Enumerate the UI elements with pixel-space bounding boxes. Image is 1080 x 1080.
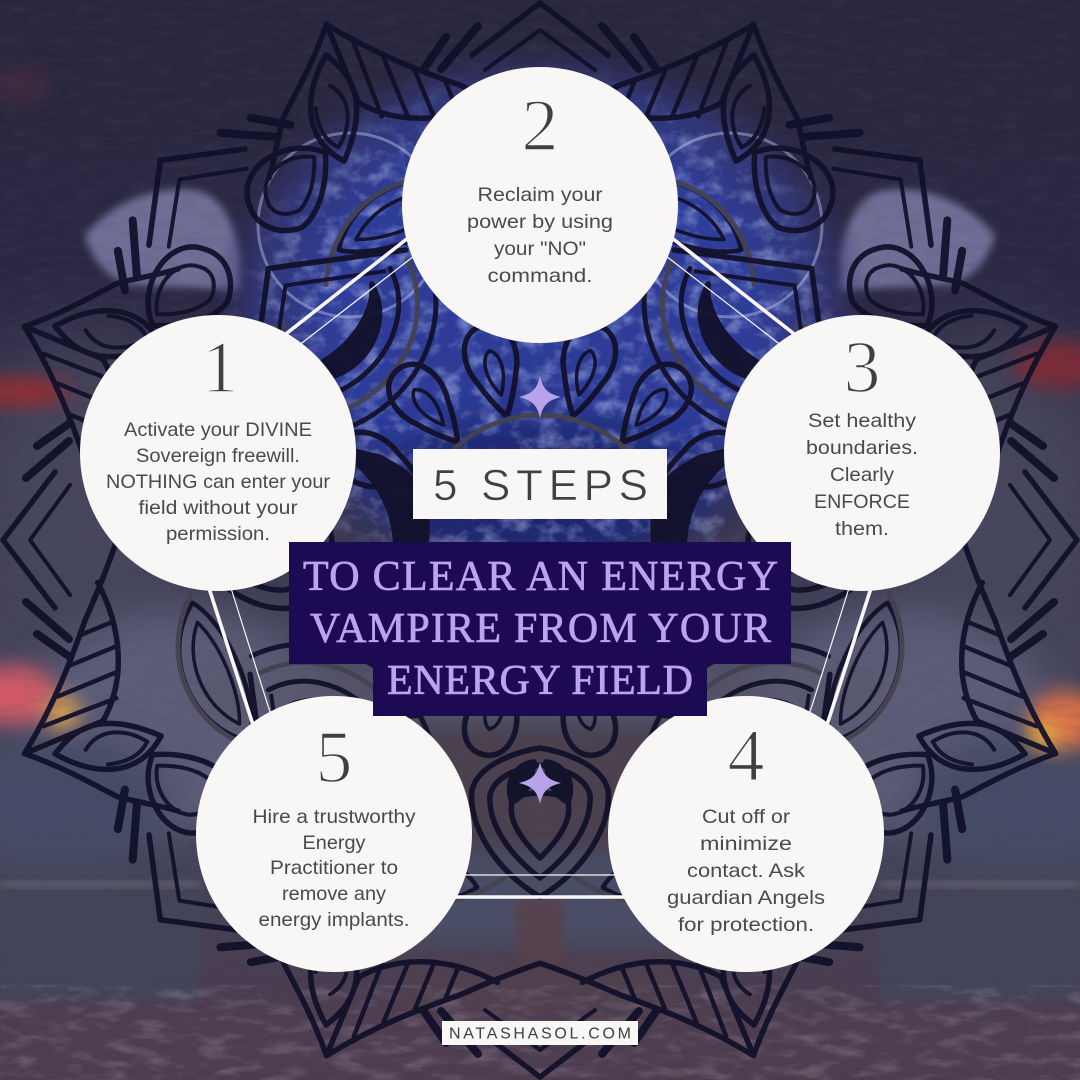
footer: website: NATASHASOL.COM: [449, 1026, 631, 1042]
left statue: [0, 189, 330, 1005]
step 3 circle: [724, 315, 1000, 591]
footer: website: [442, 1021, 638, 1045]
step 4 circle: guardian Angels: [667, 887, 825, 909]
step 5 circle: remove any: [282, 883, 386, 905]
step 4 circle: Cut off or: [702, 806, 791, 828]
step 1 circle: [80, 315, 356, 591]
diagonal kites with crescents: [182, 182, 898, 898]
step 1 circle: permission.: [166, 523, 270, 545]
step 4 circle: contact. Ask: [687, 860, 805, 882]
step 5 circle: 5: [316, 717, 352, 799]
step 1 circle: 1: [202, 327, 238, 409]
step 2 circle: [402, 67, 678, 343]
icon: four-point star bottom: [519, 762, 561, 804]
step 1 circle: Sovereign freewill.: [136, 445, 300, 467]
step 5 circle: Hire a trustworthy: [252, 806, 416, 828]
inner lobes: [328, 319, 752, 761]
step 4 circle: 4: [728, 715, 764, 797]
step 3 circle: 3: [844, 327, 880, 409]
heading: subtitle banner: VAMPIRE FROM YOUR: [310, 606, 771, 652]
pentagon connector lines: [208, 238, 872, 897]
step 1 circle: NOTHING can enter your: [106, 471, 331, 493]
step 2 circle: Reclaim your: [478, 184, 603, 206]
step 5 circle: energy implants.: [258, 909, 410, 931]
step 2 circle: your "NO": [494, 238, 586, 260]
step 4 circle: [608, 696, 884, 972]
icon: four-point star top: [519, 376, 561, 418]
step 5 circle: [196, 696, 472, 972]
right statue: [750, 189, 1080, 1005]
red glows and flames: [0, 341, 1080, 750]
step 3 circle: boundaries.: [806, 437, 918, 459]
step 4 circle: for protection.: [678, 914, 814, 936]
step 2 circle: 2: [522, 85, 558, 167]
step 3 circle: them.: [835, 518, 889, 540]
step 3 circle: Set healthy: [808, 410, 916, 432]
heading: 5 steps: 5 STEPS: [433, 461, 648, 510]
step 3 circle: ENFORCE: [814, 491, 910, 513]
heading: subtitle banner: [289, 542, 791, 716]
step 2 circle: command.: [488, 265, 592, 287]
blue centre glow: [220, 53, 859, 542]
step 4 circle: minimize: [700, 833, 792, 855]
step 5 circle: Practitioner to: [270, 857, 398, 879]
step 3 circle: Clearly: [830, 464, 894, 486]
step 1 circle: field without your: [138, 497, 298, 519]
step 5 circle: Energy: [302, 832, 366, 854]
step 1 circle: Activate your DIVINE: [124, 419, 312, 441]
step 2 circle: power by using: [467, 211, 613, 233]
heading: 5 steps: [413, 449, 667, 519]
heading: subtitle banner: ENERGY FIELD: [387, 658, 693, 704]
heading: subtitle banner: TO CLEAR AN ENERGY: [303, 554, 778, 600]
nested mandorlas: [183, 183, 897, 897]
